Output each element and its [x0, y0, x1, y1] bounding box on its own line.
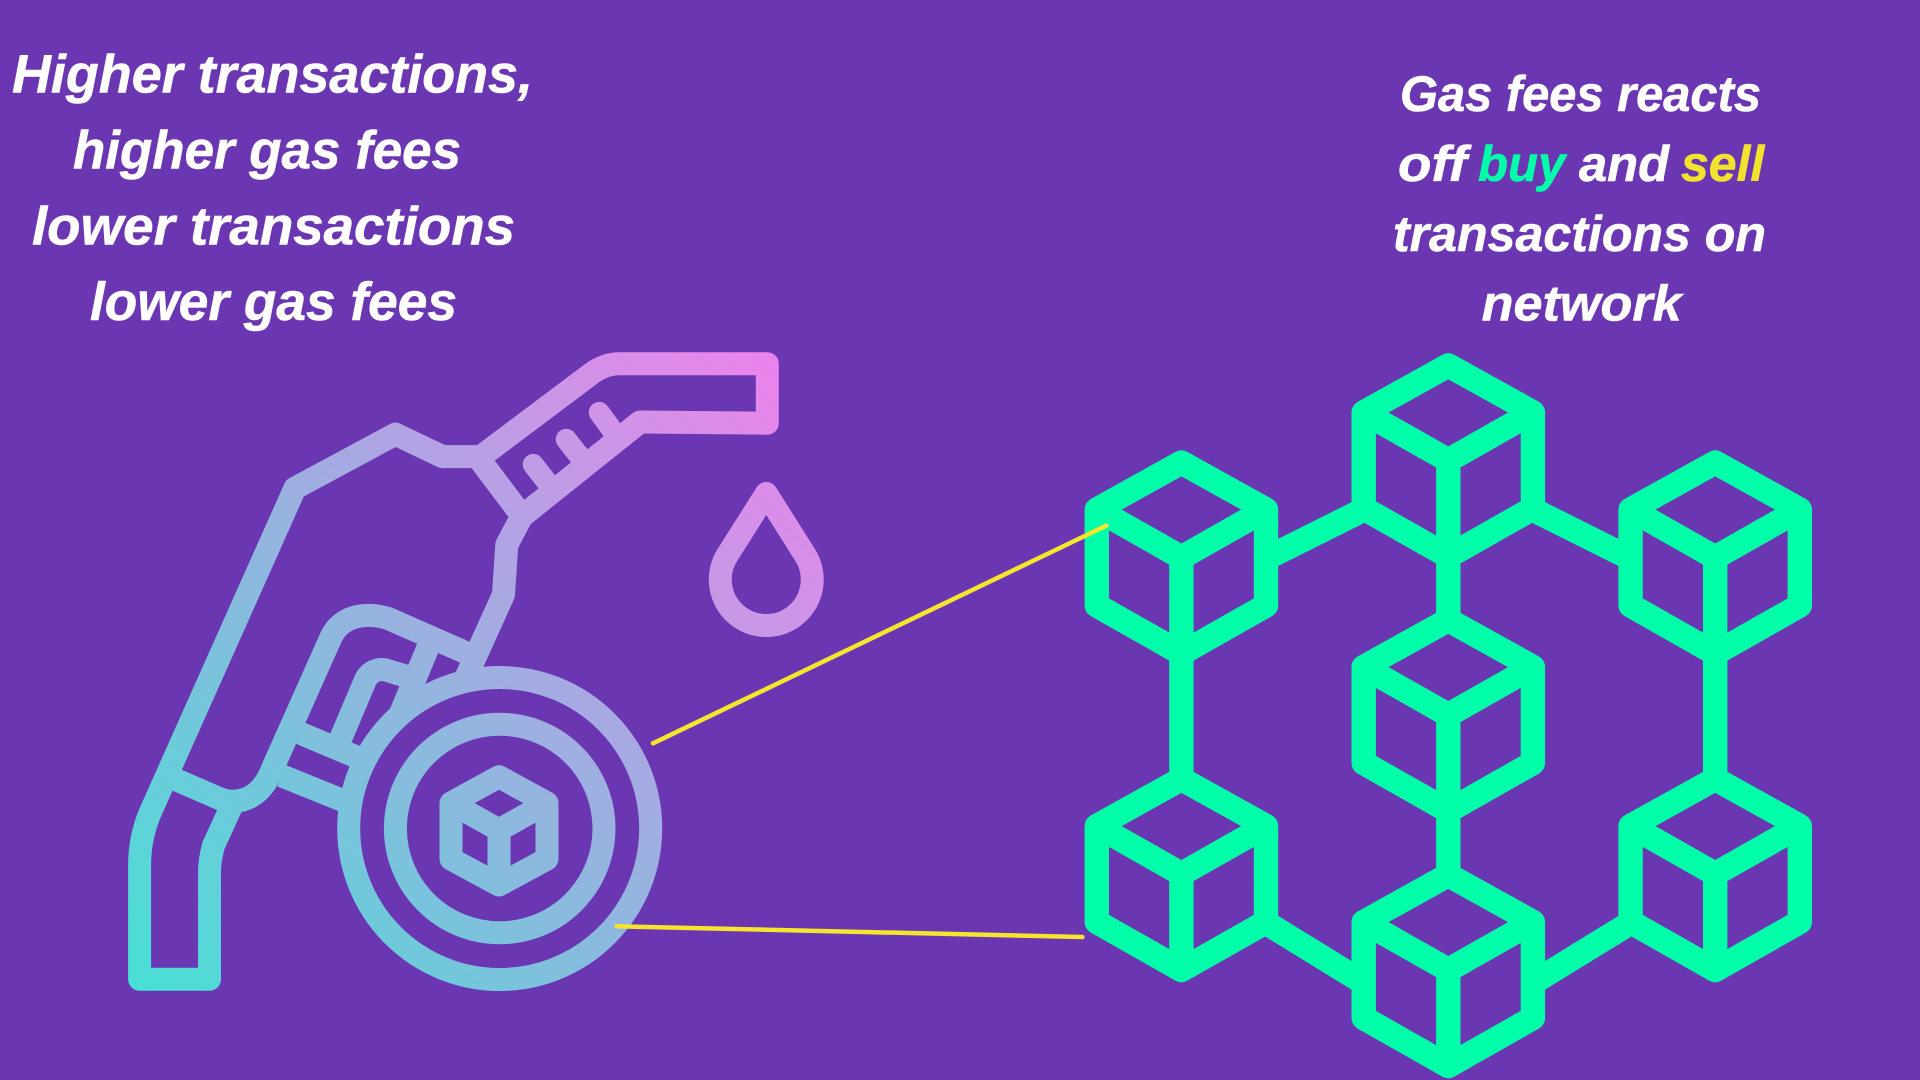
heading: gas fees reacts: network [1482, 276, 1684, 332]
yellow connector: upper [653, 526, 1106, 743]
coin cube [451, 777, 547, 885]
fuel drop [720, 494, 812, 626]
heading: gas fees reacts: Gas fees reacts [1400, 66, 1761, 122]
pump handle band [172, 615, 478, 801]
blockchain network [1097, 365, 1800, 1066]
cube: bottom centre [1364, 875, 1533, 1066]
icon: fuel pump nozzle with blockchain coin [140, 364, 812, 980]
heading: higher and lower transactions: lower gas fees [90, 272, 457, 332]
heading: gas fees reacts [1393, 66, 1766, 332]
heading: gas fees reacts: transactions on [1393, 206, 1766, 262]
trigger ticks [533, 412, 615, 486]
heading: higher and lower transactions [12, 45, 533, 332]
coin inner ring [395, 724, 604, 933]
cube: bottom left [1097, 779, 1266, 970]
cube: top left [1097, 462, 1266, 654]
yellow connector: lower [617, 926, 1082, 937]
cube: top right [1631, 462, 1800, 654]
heading: higher and lower transactions: higher gas fees [73, 120, 461, 180]
handle inner bars [282, 638, 432, 801]
heading: gas fees reacts: buy [1478, 136, 1568, 192]
heading: higher and lower transactions: lower transactions [32, 196, 515, 256]
heading: gas fees reacts: sell [1681, 136, 1765, 192]
cube: bottom right [1631, 779, 1800, 970]
coin outer ring [349, 678, 651, 980]
nozzle spout [479, 364, 767, 516]
heading: gas fees reacts: and [1579, 136, 1670, 192]
hand and hose outline [140, 434, 522, 979]
cube: middle [1364, 620, 1533, 811]
heading: higher and lower transactions: Higher transactions, [12, 45, 533, 105]
cube: top centre [1364, 365, 1533, 556]
heading: gas fees reacts: off [1398, 136, 1472, 192]
network connectors [1181, 510, 1715, 983]
